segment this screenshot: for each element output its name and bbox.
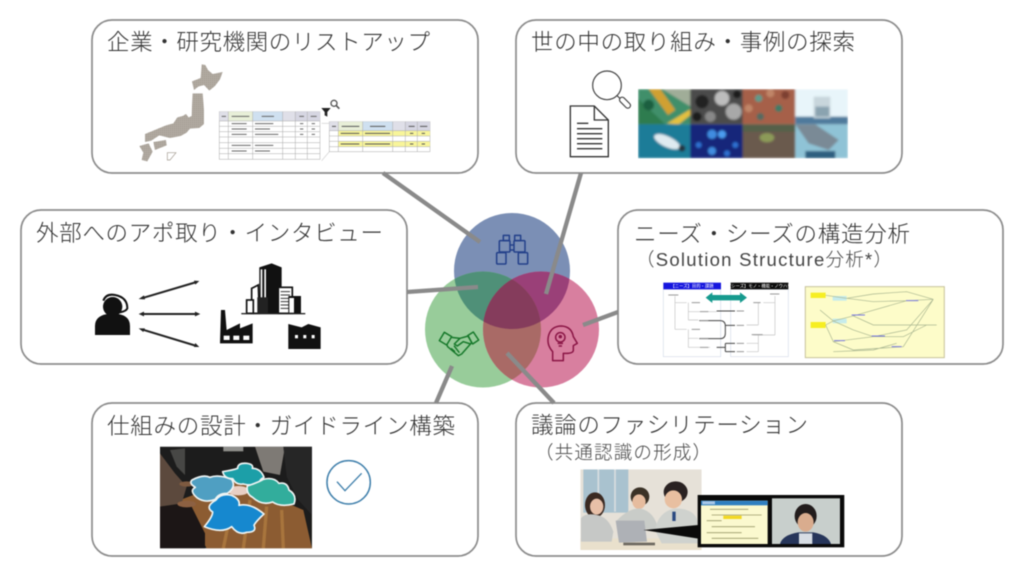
subheading: Solution Structure: （Solution Structure分析*）: [636, 249, 892, 270]
panel: needs and seeds structure analysis: [618, 210, 1003, 364]
panel: framework design and guidelines: [92, 403, 478, 556]
icon: check mark in circle: [327, 461, 370, 504]
icon: person with headset: [95, 295, 130, 335]
video call screen: [698, 495, 844, 547]
panel: external appointments and interviews: [21, 210, 407, 364]
heading: company list: 企業・研究機関のリストアップ: [107, 30, 430, 55]
panel: discussion facilitation: [516, 403, 902, 556]
icon: factory right: [288, 324, 321, 349]
photo: three colleagues meeting: [580, 469, 702, 550]
diagram: needs and seeds tree: [663, 283, 792, 357]
icon: office buildings: [241, 263, 305, 314]
icon: handshake: [439, 332, 479, 356]
heading: interviews: 外部へのアポ取り・インタビュー: [36, 221, 383, 246]
venn diagram: three overlapping circles: [425, 213, 599, 388]
callout wedge: [643, 525, 698, 539]
icon: factory left: [220, 310, 253, 343]
subheading: shared understanding: （共通認識の形成）: [535, 442, 711, 463]
diagram: yellow network chart: [805, 287, 944, 358]
table: full list: [219, 112, 320, 159]
heading: framework design: 仕組みの設計・ガイドライン構築: [107, 414, 455, 439]
heading: facilitation: 議論のファシリテーション: [531, 413, 808, 438]
map of Japan: [139, 64, 223, 161]
puzzle pieces: [191, 463, 295, 533]
panel: company and research institution list: [92, 20, 478, 173]
photo collage: technology fields: [638, 89, 848, 158]
heading: structure analysis: ニーズ・シーズの構造分析: [634, 222, 910, 247]
icon: head with light bulb: [548, 326, 577, 361]
icon: binoculars: [497, 235, 528, 264]
panel: exploring initiatives and case studies: [516, 20, 902, 173]
heading: case studies: 世の中の取り組み・事例の探索: [531, 30, 855, 55]
icon: document: [570, 106, 608, 157]
icon: funnel and magnifier: [321, 100, 339, 161]
arrows: two-way communication: [139, 281, 200, 347]
diagram: needs and seeds tree: 【シーズ】モノ・機能・ノウハウ: [727, 283, 792, 290]
photo: hands with puzzle pieces: [160, 447, 312, 548]
table: filtered list: [329, 122, 430, 152]
icon: magnifying glass: [593, 71, 632, 109]
diagram: needs and seeds tree: 【ニーズ】目的・課題: [670, 283, 714, 290]
connector lines to circles: [383, 173, 618, 403]
